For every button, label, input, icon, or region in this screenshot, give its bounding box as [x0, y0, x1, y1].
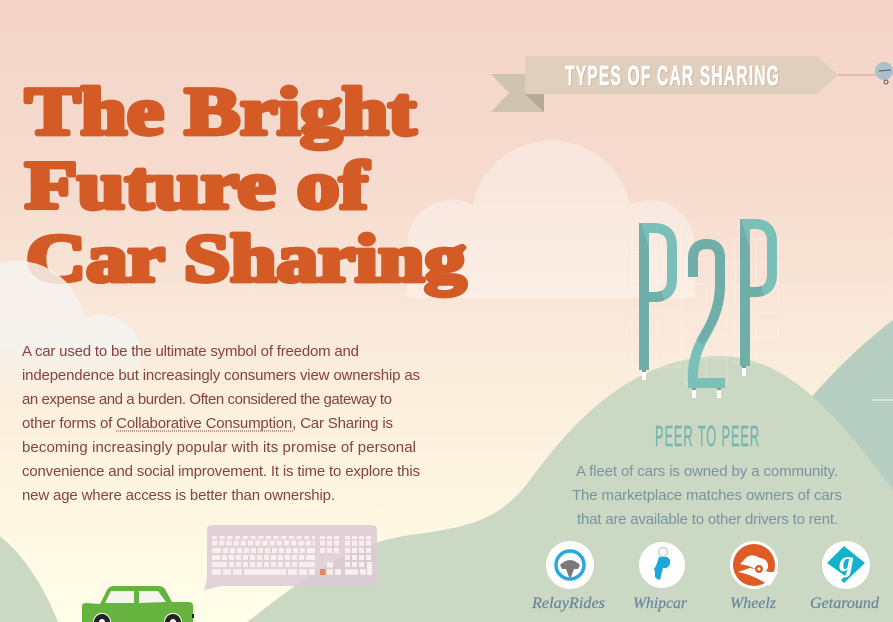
intro paragraph: convenience and social improvement. It is time to explore this: [22, 463, 420, 480]
P2P lettering: [632, 224, 778, 398]
hill: main: [247, 356, 893, 622]
cloud: left: [0, 261, 141, 400]
intro paragraph: new age where access is better than ownership.: [22, 487, 335, 504]
intro paragraph: other forms of Collaborative Consumption, Car Sharing is: [22, 415, 393, 432]
icon: RelayRides: [546, 541, 594, 589]
title: The Bright: [25, 73, 416, 149]
text: PEER TO PEER: [655, 421, 760, 453]
icon: Whipcar: [639, 542, 685, 588]
brand labels: [531, 595, 879, 612]
peer to peer description: The marketplace matches owners of cars: [572, 487, 842, 504]
peer to peer description: [572, 463, 842, 528]
brand labels: Whipcar: [633, 595, 688, 612]
title: Future of: [25, 147, 370, 223]
intro paragraph: becoming increasingly popular with its promise of personal: [22, 439, 416, 456]
hill: left: [0, 536, 58, 622]
title: [25, 73, 466, 296]
brand labels: Getaround: [810, 595, 879, 612]
intro paragraph: an expense and a burden. Often considered the gateway to: [22, 391, 392, 408]
keyboard speech bubble: [204, 525, 377, 590]
intro paragraph: [22, 343, 420, 504]
icon: green car: [82, 586, 194, 622]
brand labels: RelayRides: [531, 595, 605, 612]
title: Car Sharing: [26, 220, 466, 296]
peer to peer description: A fleet of cars is owned by a community.: [576, 463, 838, 480]
intro paragraph: independence but increasingly consumers view ownership as: [22, 367, 420, 384]
ribbon heading: [491, 56, 838, 112]
hill: back right: [800, 320, 893, 622]
cloud: centre: [407, 140, 695, 298]
brand labels: Wheelz: [730, 595, 776, 612]
peer to peer description: that are available to other drivers to rent.: [577, 511, 838, 528]
intro paragraph: A car used to be the ultimate symbol of freedom and: [22, 343, 359, 360]
icon: Getaround: [822, 541, 870, 589]
connector and node: [838, 62, 893, 84]
icon: Wheelz: [730, 541, 778, 589]
icon: Getaround: g: [838, 545, 854, 578]
